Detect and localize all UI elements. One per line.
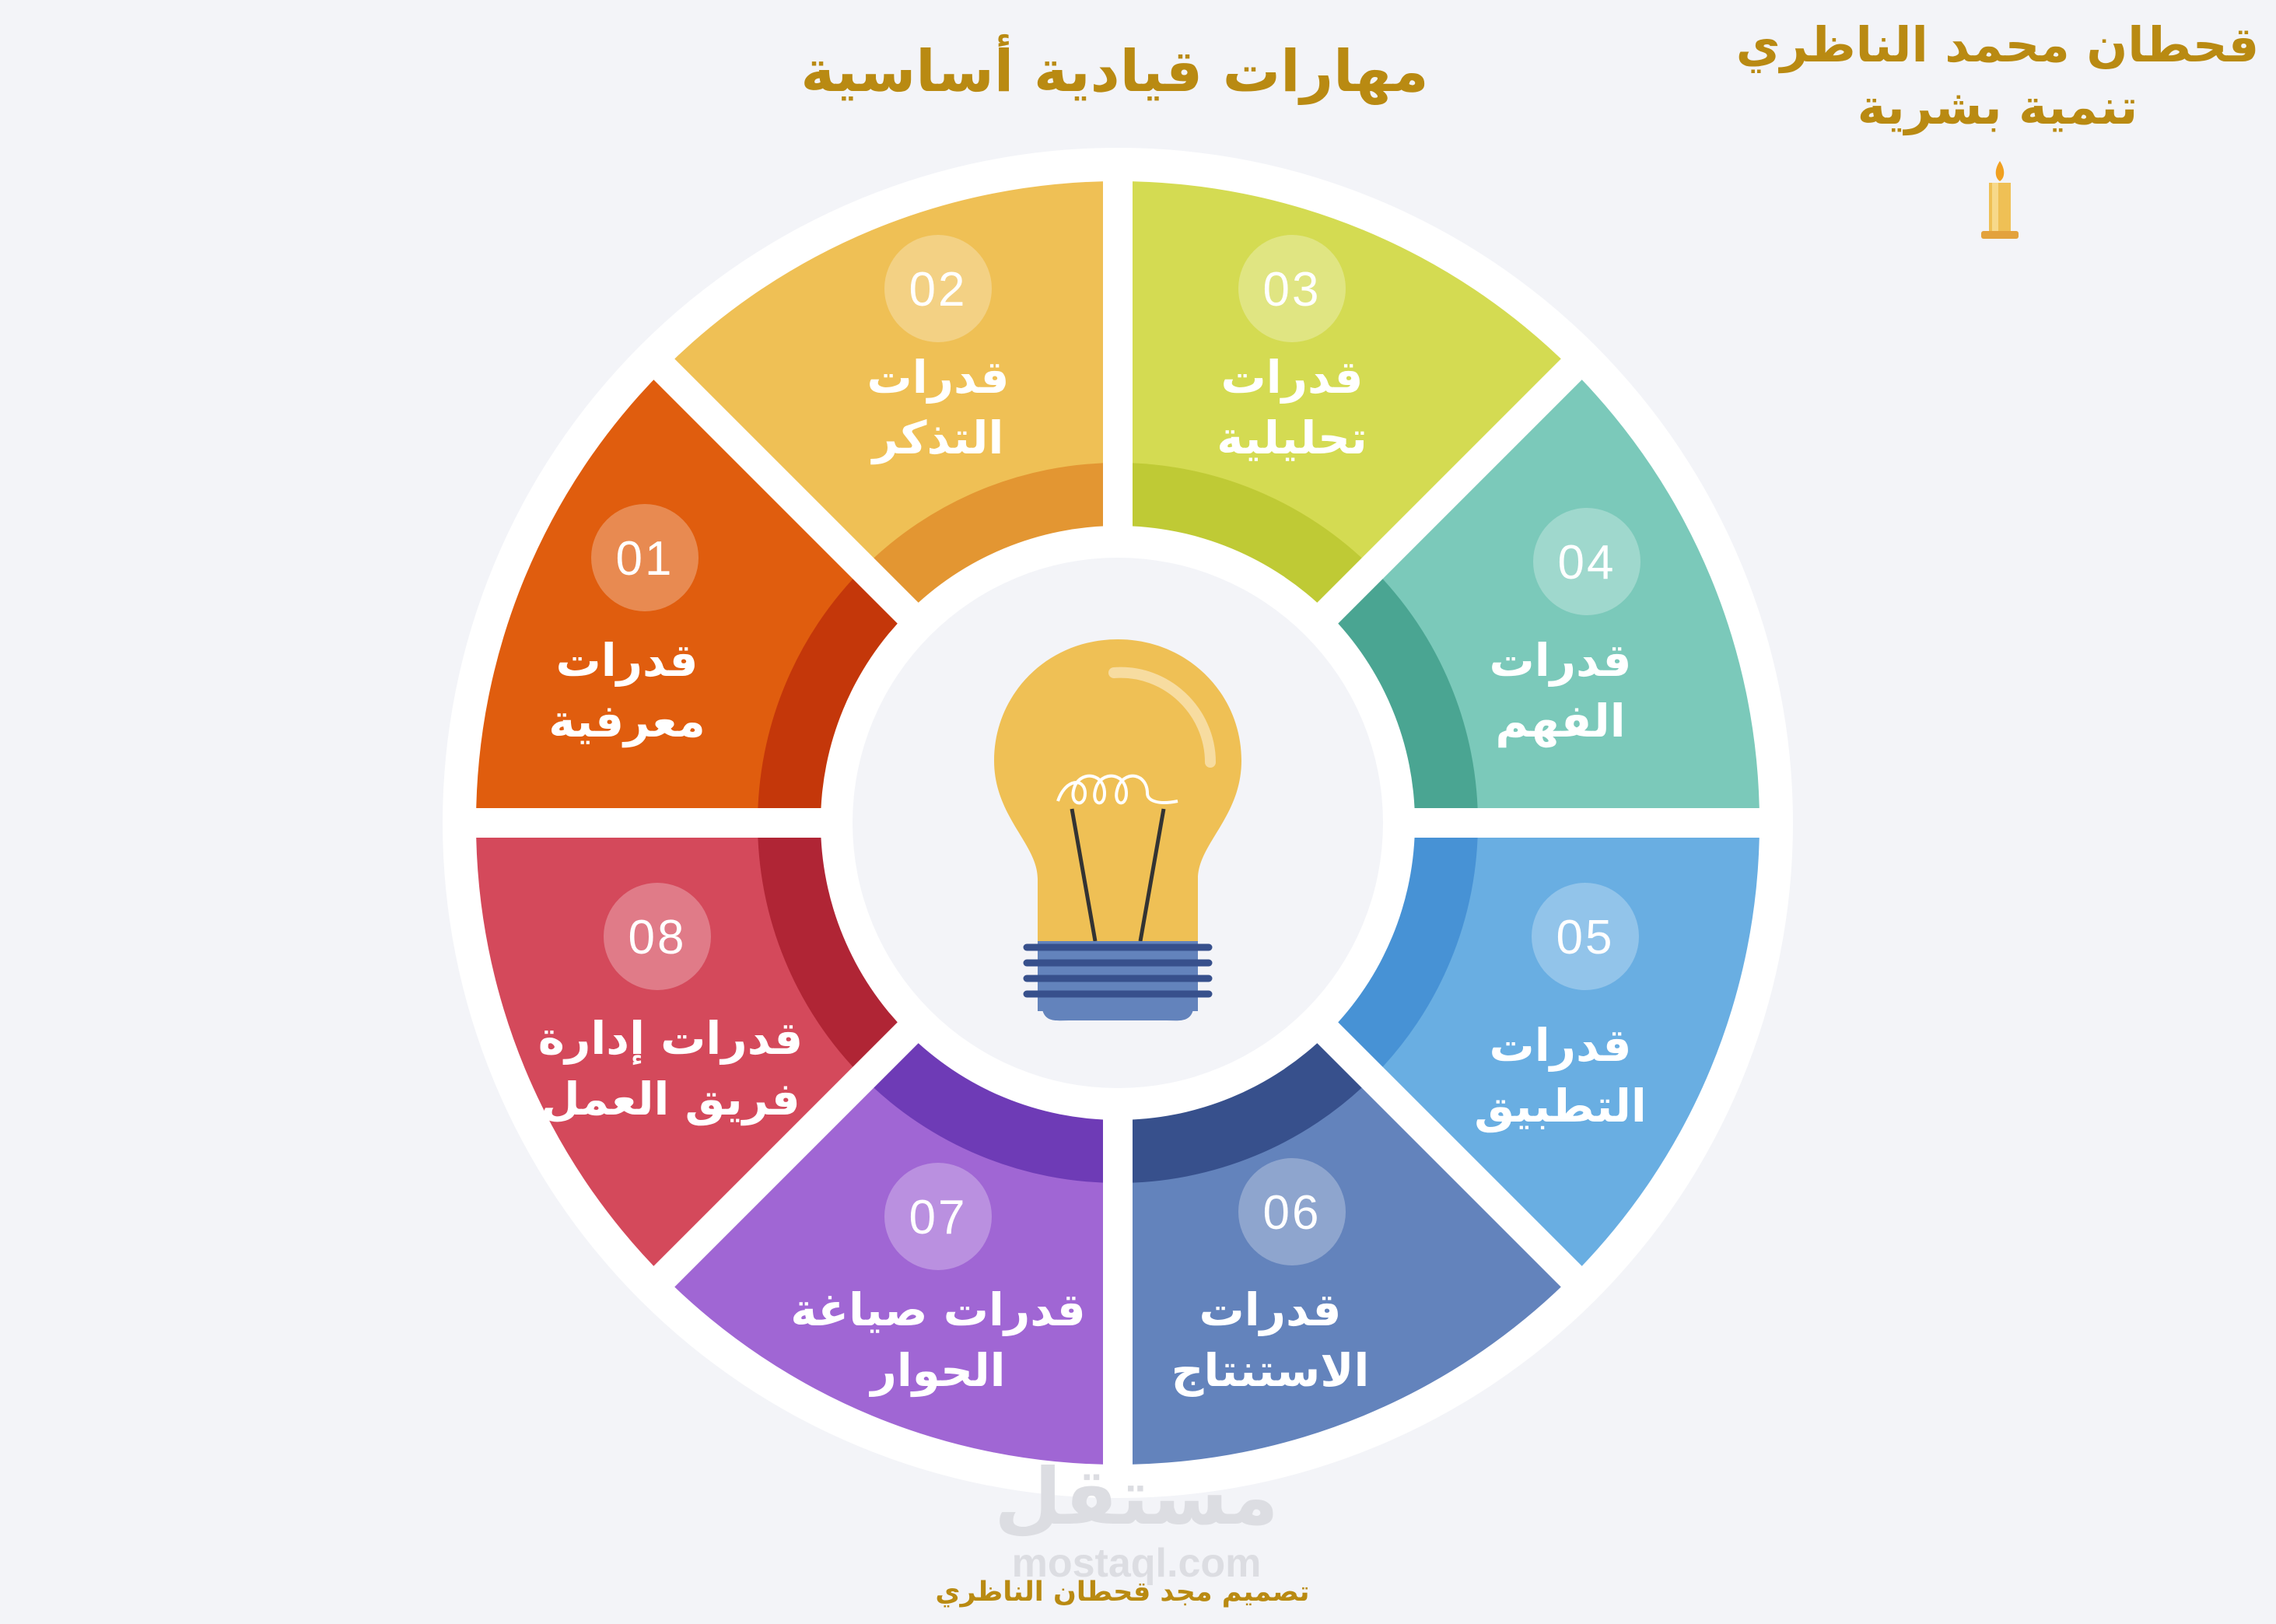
chart: leadership skills wheel: 08 <box>629 911 686 964</box>
segment 04 <box>1118 369 1760 823</box>
label 03: تحليلية <box>1217 411 1367 464</box>
author block top right: تنمية بشرية <box>1858 79 2138 135</box>
segment 06 <box>1118 823 1571 1465</box>
label 06: الاستنتاج <box>1171 1344 1369 1397</box>
label 02: قدرات <box>867 351 1010 404</box>
watermark: mostaql.com <box>1012 1541 1261 1586</box>
chart: leadership skills wheel: 06 <box>1263 1186 1321 1240</box>
icon: candle <box>1981 161 2019 239</box>
author block top right <box>1736 16 2259 135</box>
label 02: التذكر <box>873 411 1003 464</box>
chart: leadership skills wheel: 02 <box>909 263 967 317</box>
watermark <box>994 1451 1279 1586</box>
label 01: معرفية <box>548 695 706 747</box>
label 07: قدرات صياغة <box>790 1283 1086 1336</box>
label 08: قدرات إدارة <box>538 1012 803 1065</box>
label 07: الحوار <box>870 1344 1006 1397</box>
segment 02 <box>664 181 1118 823</box>
label 04: قدرات <box>1489 634 1632 687</box>
segment 03 <box>1118 181 1571 823</box>
label 03: قدرات <box>1220 351 1364 404</box>
author block top right: قحطان محمد الناظري <box>1736 16 2259 73</box>
chart: leadership skills wheel: 03 <box>1263 263 1321 317</box>
label 04: الفهم <box>1495 695 1626 747</box>
footer credit: تصميم مجد قحطان الناظري <box>935 1577 1310 1608</box>
label 07 <box>790 1283 1086 1397</box>
chart: leadership skills wheel: 05 <box>1556 911 1614 964</box>
chart: leadership skills wheel: 07 <box>909 1191 967 1244</box>
label 05 <box>1474 1019 1647 1132</box>
segment 05 <box>1118 823 1760 1276</box>
segment 08 <box>476 823 1118 1276</box>
chart: leadership skills wheel: 04 <box>1558 536 1616 590</box>
label 04 <box>1489 634 1632 748</box>
label 05: قدرات <box>1489 1019 1632 1072</box>
label 06 <box>1171 1283 1369 1397</box>
label 02 <box>867 351 1010 465</box>
chart: leadership skills wheel: 01 <box>616 532 674 586</box>
label 03 <box>1217 351 1367 464</box>
number badges <box>591 235 1640 1270</box>
label 05: التطبيق <box>1474 1080 1647 1132</box>
label 01: قدرات <box>555 634 699 687</box>
label 06: قدرات <box>1199 1283 1342 1336</box>
label 01 <box>548 634 706 748</box>
icon: light bulb <box>994 639 1241 1020</box>
segment 07 <box>664 823 1118 1465</box>
label 08 <box>538 1012 803 1126</box>
watermark: مستقل <box>994 1451 1279 1542</box>
label 08: فريق العمل <box>541 1073 800 1125</box>
title: مهارات قيادية أساسية <box>800 38 1429 105</box>
segment 01 <box>476 369 1118 823</box>
